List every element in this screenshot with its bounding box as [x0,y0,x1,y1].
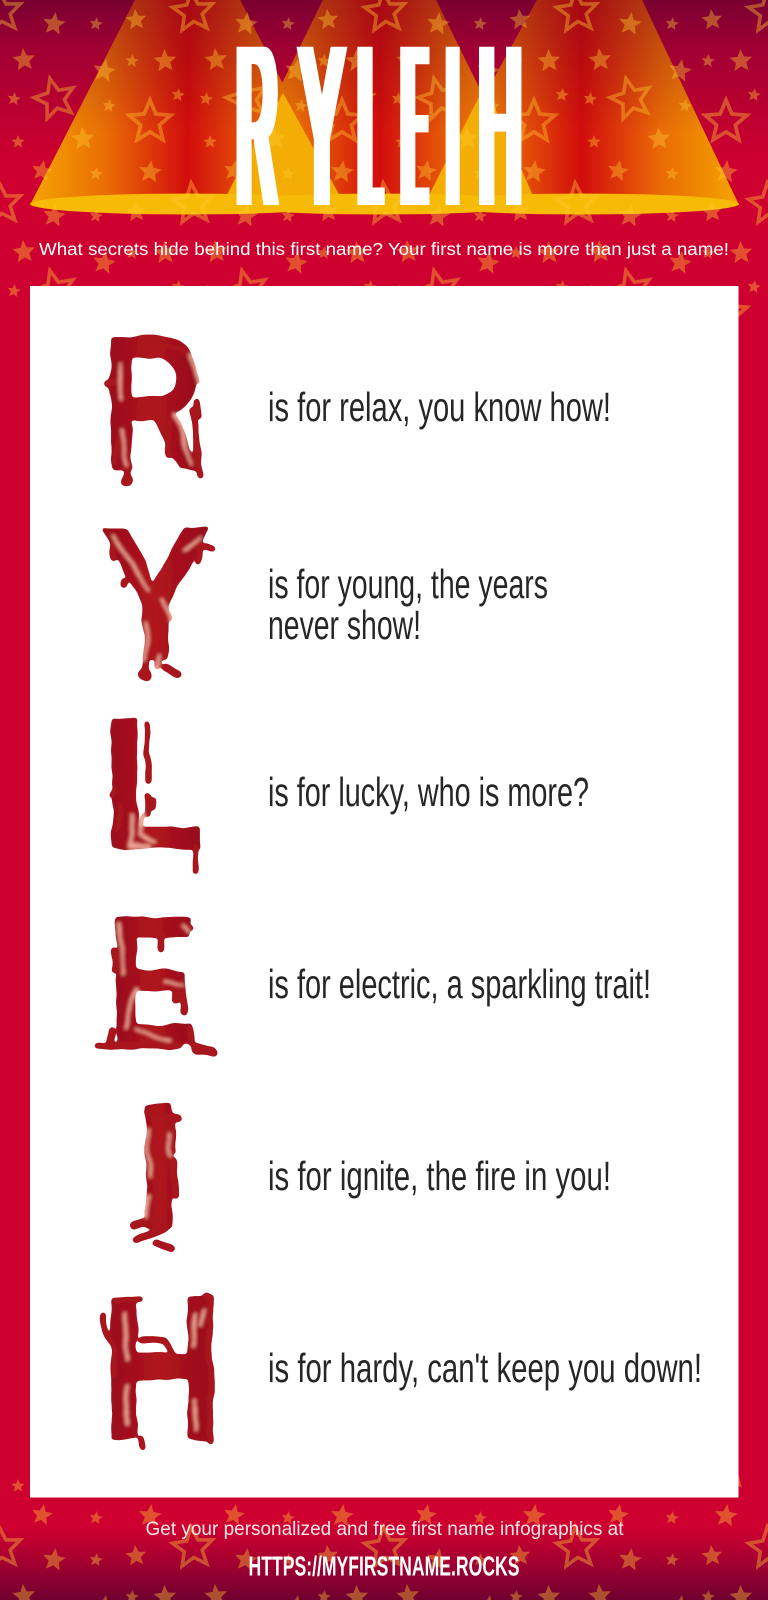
plain red margin beside the panel [0,322,768,1475]
row 1 text: is for relax, you know how! [268,384,611,430]
title: R [237,0,277,255]
title: I [447,0,459,255]
letter H: H [100,1253,224,1485]
footer text: Get your personalized and free first name infographics at [146,1518,624,1540]
subtitle: What secrets hide behind this first name? Your first name is more than just a name! [39,239,729,259]
letter Y: Y [98,486,213,701]
title: H [479,0,521,254]
letter I: I [134,1066,184,1267]
title: L [360,0,380,254]
row 2 text: never show! [268,602,421,648]
row 2 text [268,561,548,648]
title: E [404,0,426,254]
row 5 text: is for ignite, the fire in you! [268,1153,611,1199]
row 2 text: is for young, the years [268,561,548,607]
spotlights [30,0,739,214]
white content panel [30,286,738,1498]
title: Y [300,0,344,254]
row 3 text: is for lucky, who is more? [268,769,589,815]
letter R: R [102,293,203,511]
footer url: HTTPS://MYFIRSTNAME.ROCKS [248,1550,520,1582]
letter L: L [101,678,205,889]
letter E: E [108,878,197,1085]
title [237,0,521,255]
